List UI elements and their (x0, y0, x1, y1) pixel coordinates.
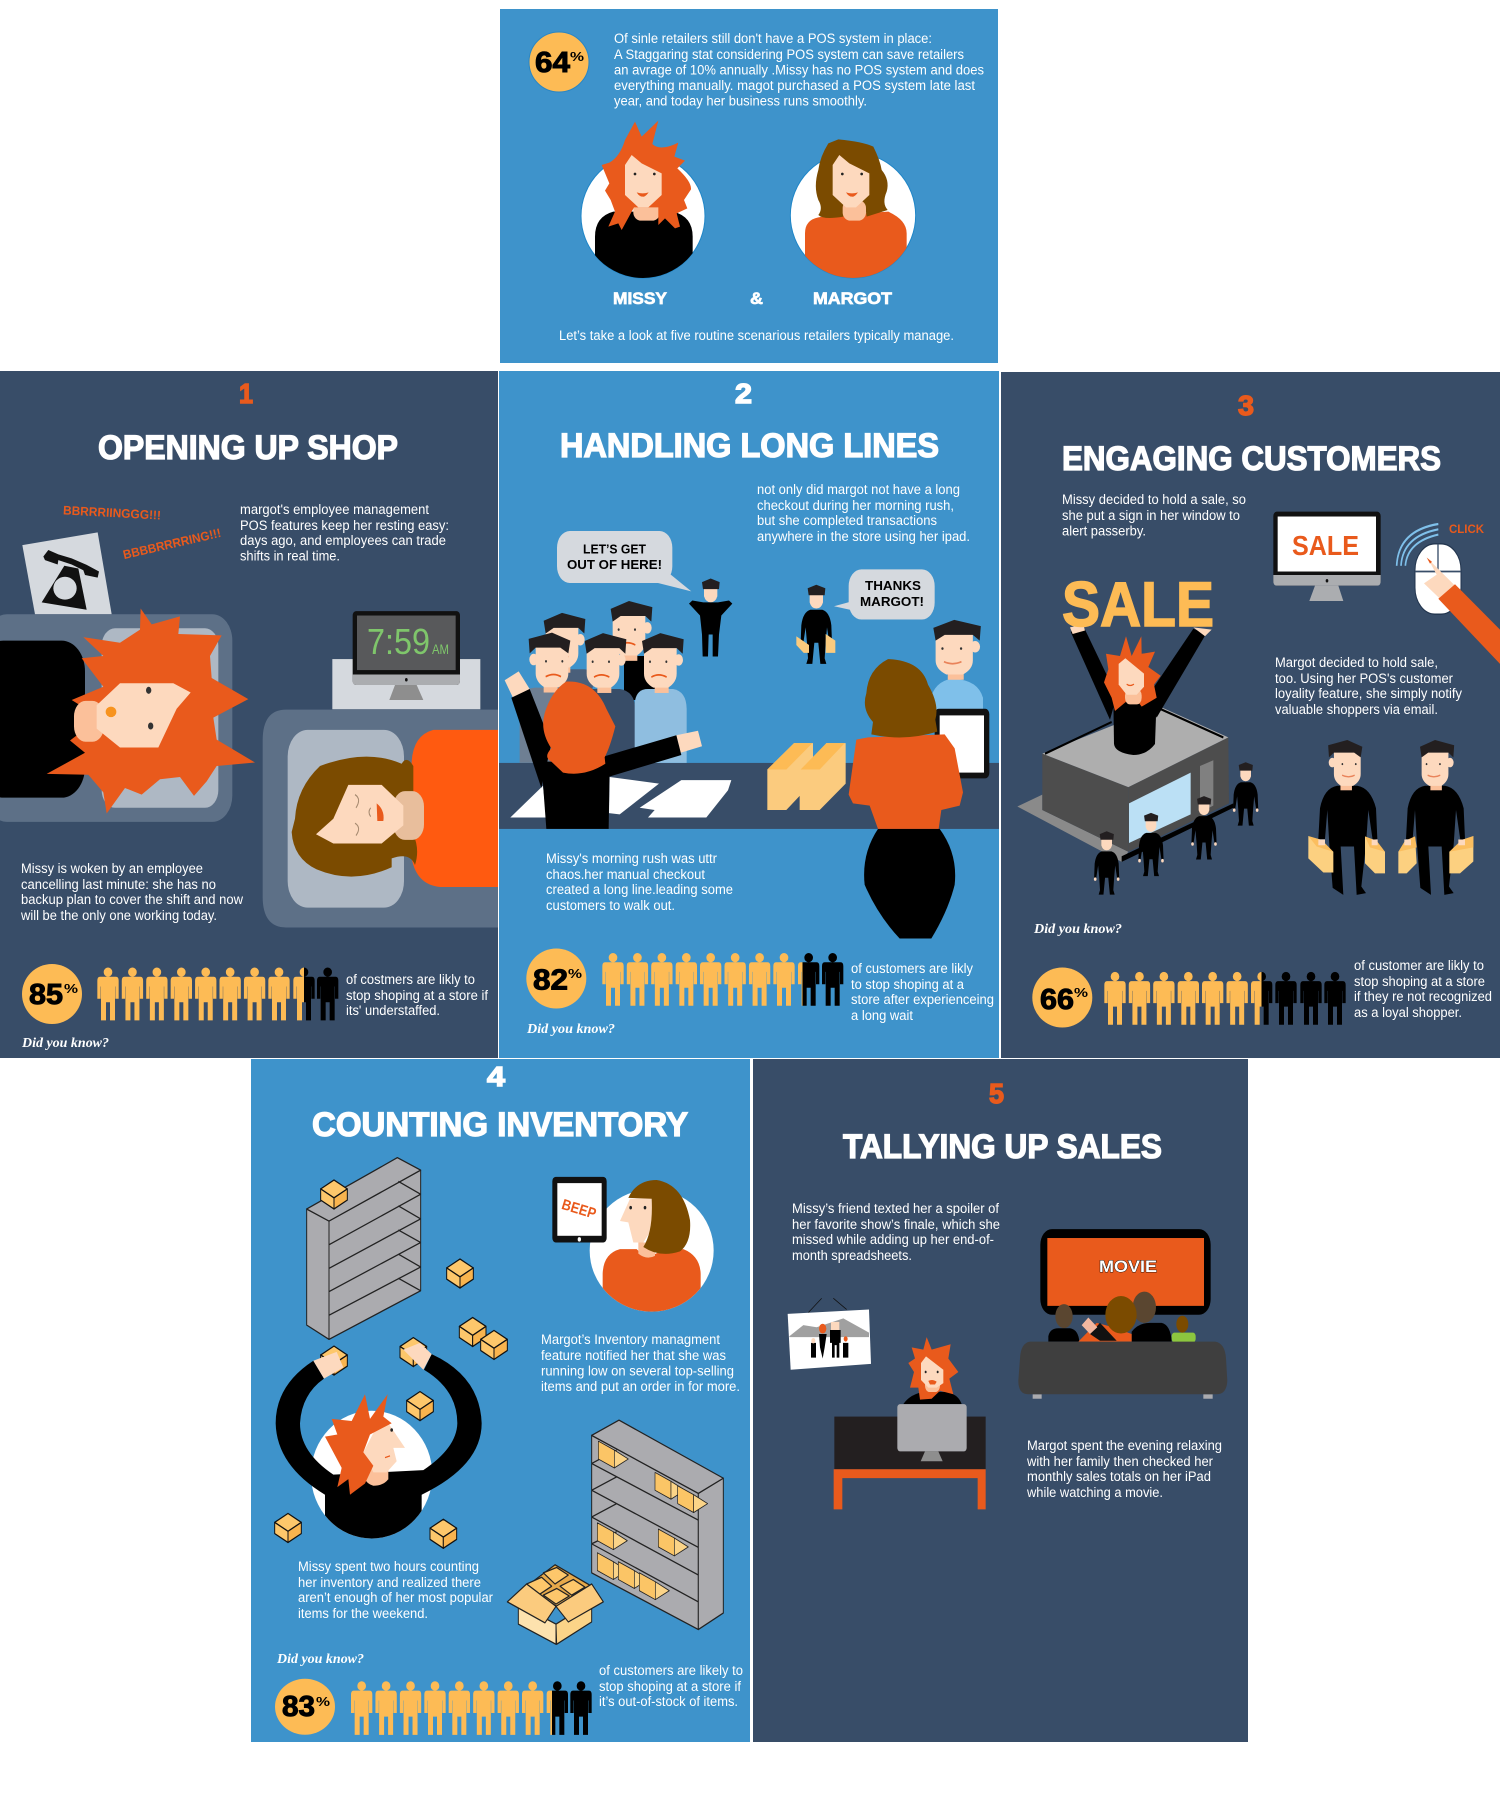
stocked shelf (592, 1420, 723, 1630)
text: Margot employee management: POS features keep her resting easy: (240, 518, 449, 533)
ring sound text: BBRRRIINGGG!!! (63, 503, 161, 523)
did you know: Did you know? (1033, 922, 1122, 937)
text: Missy woken: backup plan to cover the shift and now (21, 892, 243, 907)
number 5: 5 (989, 1078, 1004, 1109)
clock time: AM (432, 641, 449, 657)
text: Missy rush: customers to walk out. (546, 898, 675, 913)
text: Margot relaxing: while watching a movie. (1026, 1485, 1163, 1500)
boxes (767, 743, 846, 810)
stat text 82% (851, 961, 994, 1023)
text: Missy woken: cancelling last minute: she has no (21, 877, 216, 892)
speech text left (567, 542, 662, 572)
stat badge: 66%: % (1074, 985, 1089, 1000)
text: Margot relaxing: with her family then checked her (1026, 1454, 1213, 1469)
people chart: 83% (351, 1681, 592, 1735)
text: Margot employee management: margot's employee management (240, 502, 429, 517)
names: MISSY (613, 289, 668, 308)
family photo (788, 1298, 871, 1370)
stat text 85%: its' understaffed. (346, 1003, 440, 1018)
text: Margot inventory: items and put an order in for more. (541, 1379, 740, 1394)
text: Missy inventory: Missy spent two hours counting (298, 1559, 479, 1574)
text: Missy woken (20, 861, 243, 923)
panel: intro (500, 9, 998, 363)
Margot in bed (263, 710, 498, 927)
clock time: 7:59 (367, 621, 430, 662)
stat badge: 85% (22, 964, 82, 1024)
stat badge: 64%: % (570, 49, 585, 64)
large shoppers with bags (1308, 740, 1473, 895)
icon: sale monitor (1273, 512, 1381, 601)
text: Missy sale: Missy decided to hold a sale, so (1062, 492, 1246, 507)
number 3: 3 (1238, 390, 1254, 421)
portrait: Margot (790, 139, 916, 280)
stat badge: 82%: % (568, 966, 583, 981)
stat text 83%: stop shoping at a store if (599, 1679, 741, 1694)
Margot with tablet (552, 1177, 714, 1314)
click label: CLICK (1449, 522, 1484, 536)
panel 3: engaging customers (1001, 372, 1500, 1058)
intro text: everything manually. magot purchased a POS system late last (614, 78, 975, 93)
stat text 66%: as a loyal shopper. (1354, 1005, 1462, 1020)
text: Missy inventory: her inventory and realized there (298, 1575, 481, 1590)
heading: HANDLING LONG LINES (560, 427, 939, 465)
text: Missy spoiler: month spreadsheets. (792, 1248, 912, 1263)
did you know: Did you know? (276, 1652, 364, 1667)
Missy on roof (1070, 624, 1212, 755)
movie label: MOVIE (1099, 1257, 1157, 1276)
text: Missy inventory: aren’t enough of her most popular (298, 1590, 493, 1605)
text: Margot checkout: but she completed transactions (757, 513, 937, 528)
text: Margot sale: Margot decided to hold sale, (1275, 655, 1438, 670)
family watching movie (1018, 1229, 1227, 1399)
text: Missy woken: Missy is woken by an employee (21, 861, 203, 876)
panel 2: handling long lines (499, 371, 999, 1058)
scattered boxes (275, 1180, 507, 1548)
illustration: store and devices (1017, 512, 1500, 895)
intro text: A Staggaring stat considering POS system can save retailers (614, 47, 964, 62)
speech text right: THANKS (865, 578, 921, 593)
stat text 83% (599, 1663, 743, 1709)
text: Margot checkout (757, 482, 970, 544)
stat badge: 83%: % (316, 1694, 331, 1709)
text: Margot inventory (541, 1332, 740, 1394)
intro text: an avrage of 10% annually .Missy has no POS system and does (614, 62, 984, 78)
text: Missy sale: she put a sign in her window to (1062, 508, 1240, 523)
ring sound text (63, 503, 222, 562)
text: Margot sale: loyality feature, she simply notify (1275, 686, 1462, 701)
did you know: Did you know? (526, 1022, 615, 1037)
store building (1017, 707, 1233, 862)
text: Margot employee management: shifts in real time. (240, 548, 340, 564)
counter (499, 763, 999, 829)
icon: mouse click (1397, 524, 1500, 664)
stat badge: 85%: % (64, 981, 79, 996)
stat badge: 82% (526, 948, 586, 1008)
illustration: beds and sleepers (0, 532, 498, 927)
text: Margot inventory: Margot’s Inventory managment (541, 1332, 720, 1347)
illustration: evening (788, 1229, 1227, 1509)
happy customer (931, 620, 983, 722)
stat text 83%: it’s out-of-stock of items. (599, 1694, 738, 1709)
ring sound text: BBBBRRRRING!!! (122, 526, 222, 562)
intro closing line: Let’s take a look at five routine scenarious retailers typically manage. (559, 328, 954, 343)
small shoppers (1094, 762, 1258, 895)
stat text 82%: a long wait (851, 1008, 913, 1023)
stat text 82%: of customers are likly (851, 961, 973, 976)
text: Missy spoiler: her favorite show’s finale, which she (792, 1217, 1000, 1232)
names (613, 289, 893, 308)
stat text 85% (346, 972, 488, 1018)
text: Margot sale (1275, 655, 1462, 717)
heading: COUNTING INVENTORY (312, 1106, 688, 1144)
text: Missy inventory (298, 1559, 493, 1621)
icon: telephone card (22, 532, 112, 614)
people chart: 82% (602, 953, 843, 1006)
text: Missy spoiler (792, 1201, 1000, 1263)
text: Missy sale: alert passerby. (1062, 524, 1146, 538)
illustration: checkout scene (499, 531, 999, 938)
text: Margot employee management (240, 502, 449, 564)
stat text 66%: stop shoping at a store (1354, 974, 1485, 989)
text: Margot checkout: not only did margot not have a long (757, 482, 960, 497)
did you know: Did you know? (21, 1036, 109, 1051)
Margot from behind (849, 659, 963, 938)
empty shelf (307, 1158, 421, 1339)
people chart: 85% (97, 968, 338, 1020)
text: Missy rush (546, 851, 733, 913)
angry customers (520, 601, 687, 763)
customer with bags (796, 585, 835, 664)
stat badge: 82%: 82 (533, 964, 568, 996)
illustration: inventory (275, 1158, 723, 1644)
text: Margot inventory: running low on several top-selling (541, 1364, 734, 1378)
Missy juggling boxes (276, 1343, 482, 1542)
monitor sale text: SALE (1292, 530, 1359, 561)
text: Margot relaxing: Margot spent the evening relaxing (1027, 1438, 1222, 1453)
stat badge: 66%: 66 (1040, 984, 1074, 1016)
text: Missy inventory: items for the weekend. (298, 1606, 428, 1621)
portrait: Missy (581, 121, 705, 280)
stat text 66%: of customer are likly to (1354, 958, 1484, 973)
stat text 85%: of costmers are likly to (346, 972, 475, 987)
text: Margot relaxing (1026, 1438, 1222, 1500)
speech text left: OUT OF HERE! (567, 557, 662, 572)
text: Margot relaxing: monthly sales totals on her iPad (1027, 1469, 1211, 1484)
panel 5: tallying up sales (753, 1059, 1248, 1742)
stat text 66% (1354, 958, 1492, 1020)
intro text (614, 31, 984, 108)
tablet (935, 709, 989, 778)
stat badge: 64% (529, 32, 589, 92)
names: & (750, 289, 763, 308)
intro text: year, and today her business runs smoothly. (614, 94, 867, 108)
big sale sign: SALE (1062, 570, 1214, 640)
stat badge: 83% (275, 1679, 335, 1735)
text: Missy rush: created a long line.leading some (546, 882, 733, 897)
stat badge: 66% (1032, 968, 1092, 1028)
names: MARGOT (813, 289, 893, 308)
icon: alarm clock monitor (332, 611, 480, 709)
stat text 83%: of customers are likely to (599, 1663, 743, 1678)
people chart: 66% (1104, 972, 1346, 1025)
speech text left: LET’S GET (583, 542, 646, 556)
stat badge: 85%: 85 (29, 979, 63, 1011)
text: Margot checkout: anywhere in the store using her ipad. (757, 529, 970, 544)
text: Margot checkout: checkout during her morning rush, (757, 498, 954, 513)
text: Missy rush: chaos.her manual checkout (546, 867, 705, 882)
Missy at desk (834, 1337, 986, 1509)
beep label: BEEP (560, 1196, 598, 1223)
open carton (507, 1565, 603, 1644)
Missy from behind (505, 671, 731, 829)
speech bubble right (834, 569, 935, 619)
text: Margot sale: too. Using her POS's customer (1275, 671, 1453, 686)
number 1: 1 (239, 378, 253, 409)
stat text 82%: to stop shoping at a (851, 977, 964, 992)
panel 1: opening up shop (0, 371, 498, 1058)
heading: ENGAGING CUSTOMERS (1062, 440, 1441, 478)
text: Missy rush: Missy's morning rush was uttr (546, 851, 717, 866)
text: Missy sale (1062, 492, 1246, 538)
stat text 85%: stop shoping at a store if (346, 988, 488, 1003)
stat text 82%: store after experienceing (851, 992, 994, 1007)
speech text right (860, 578, 924, 609)
text: Margot sale: valuable shoppers via email. (1275, 702, 1438, 717)
shrugging customer (689, 579, 732, 656)
intro text: Of sinle retailers still don't have a POS system in place: (614, 31, 932, 46)
text: Missy spoiler: missed while adding up her end-of- (792, 1232, 994, 1247)
heading: TALLYING UP SALES (843, 1128, 1162, 1166)
text: Margot employee management: days ago, and employees can trade (240, 533, 446, 548)
stat badge: 64%: 64 (535, 47, 570, 79)
heading: OPENING UP SHOP (98, 429, 398, 467)
number 2: 2 (735, 378, 752, 409)
panel 4: counting inventory (251, 1059, 750, 1742)
stat badge: 83%: 83 (282, 1691, 315, 1723)
Missy in bed (0, 608, 255, 822)
text: Missy spoiler: Missy’s friend texted her a spoiler of (792, 1201, 999, 1216)
number 4: 4 (487, 1061, 505, 1092)
text: Missy woken: will be the only one working today. (20, 908, 217, 923)
speech bubble left (557, 531, 691, 591)
stat text 66%: if they re not recognized (1354, 989, 1492, 1004)
text: Margot inventory: feature notified her that she was (541, 1348, 726, 1363)
speech text right: MARGOT! (860, 594, 924, 609)
